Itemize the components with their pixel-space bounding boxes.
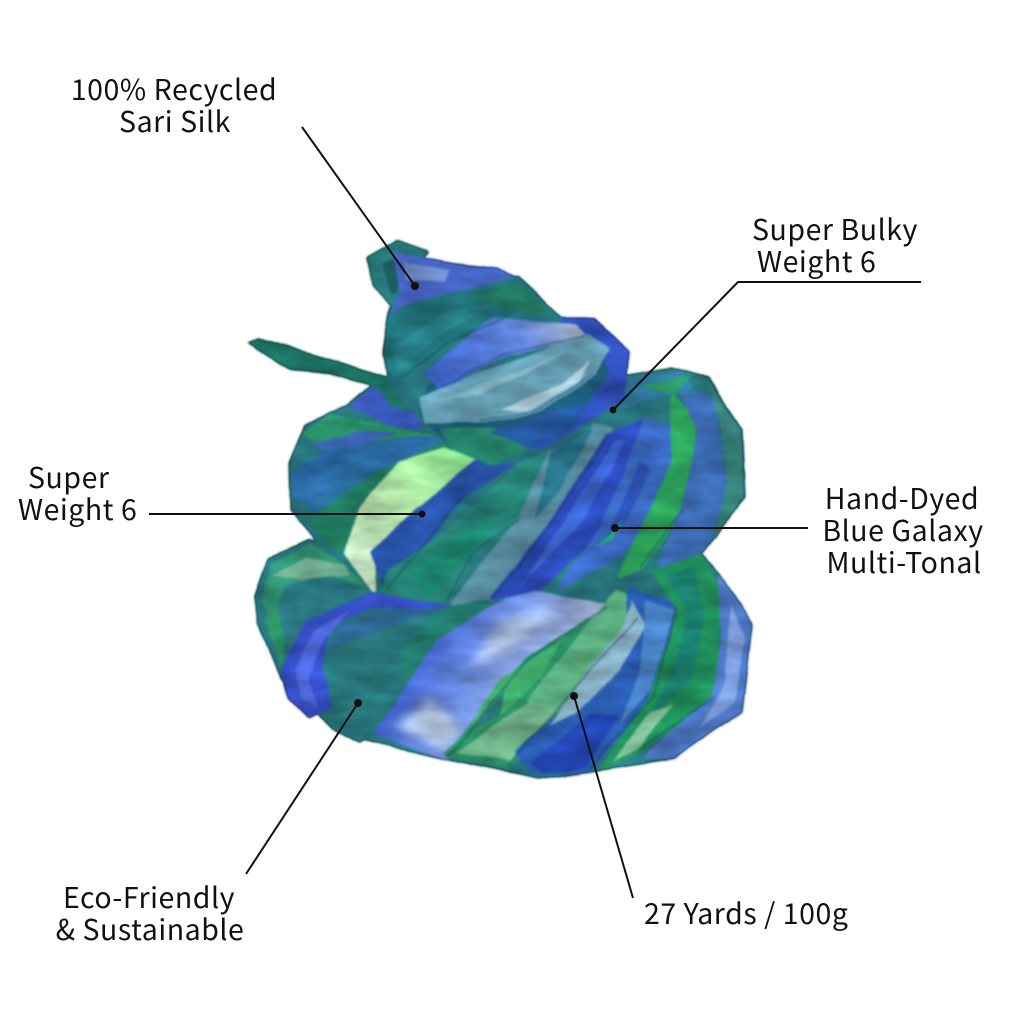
label: super weight 6: Super (28, 456, 110, 497)
blue fold (283, 595, 447, 717)
label: eco-friendly and sustainable: Eco-Friendly (63, 876, 235, 917)
teal gathered ribbon (320, 603, 493, 740)
green under band (443, 430, 523, 463)
teal loop (370, 242, 425, 305)
blue ring (493, 320, 628, 447)
leader line: eco-friendly (246, 699, 362, 874)
bottom coil (257, 543, 750, 777)
periwinkle outer ribbon (647, 577, 750, 757)
label: eco-friendly and sustainable: & Sustainable (56, 908, 244, 949)
pale teal band (422, 337, 607, 420)
blue and pale ribbons (517, 590, 677, 773)
lavender ribbon (377, 590, 607, 757)
teal band (385, 280, 560, 380)
left stacked ribbons (350, 387, 440, 430)
green ribbons (447, 600, 637, 767)
blue outer ribbon (660, 390, 727, 565)
leader line: hand-dyed (611, 524, 808, 532)
leader line: super bulky weight (610, 282, 921, 414)
label: super bulky weight 6: Super Bulky (752, 208, 918, 249)
blue to grey band (427, 320, 583, 387)
blue ribbon (373, 460, 517, 590)
label: hand-dyed blue galaxy multi-tonal: Blue Galaxy (822, 509, 984, 550)
top coil (370, 242, 628, 463)
green ribbon (620, 397, 700, 577)
label: hand-dyed blue galaxy multi-tonal: Multi-Tonal (826, 541, 982, 582)
light green ribbon (347, 450, 477, 590)
label: super weight 6: Weight 6 (18, 488, 137, 529)
leader line: super weight (149, 510, 426, 518)
middle coil (292, 370, 743, 603)
loose ribbon end (248, 338, 423, 413)
yarn illustration (248, 242, 750, 777)
leader line: yards (570, 692, 633, 898)
left green ribbons (262, 545, 370, 620)
teal green ribbon (383, 447, 553, 600)
green outer ribbons (603, 553, 720, 767)
label: 100% recycled sari silk: 100% Recycled (71, 68, 277, 109)
blue wrap (390, 255, 517, 325)
top coil base (385, 265, 628, 463)
label: 100% recycled sari silk: Sari Silk (119, 100, 231, 141)
label: 27 yards per 100g: 27 Yards / 100g (644, 892, 849, 933)
label: hand-dyed blue galaxy multi-tonal: Hand-Dyed (825, 477, 979, 518)
leader line: recycled sari silk (302, 127, 419, 290)
label: super bulky weight 6: Weight 6 (757, 240, 876, 281)
deep blue ribbons (493, 420, 647, 597)
grey teal ribbon (453, 427, 610, 603)
